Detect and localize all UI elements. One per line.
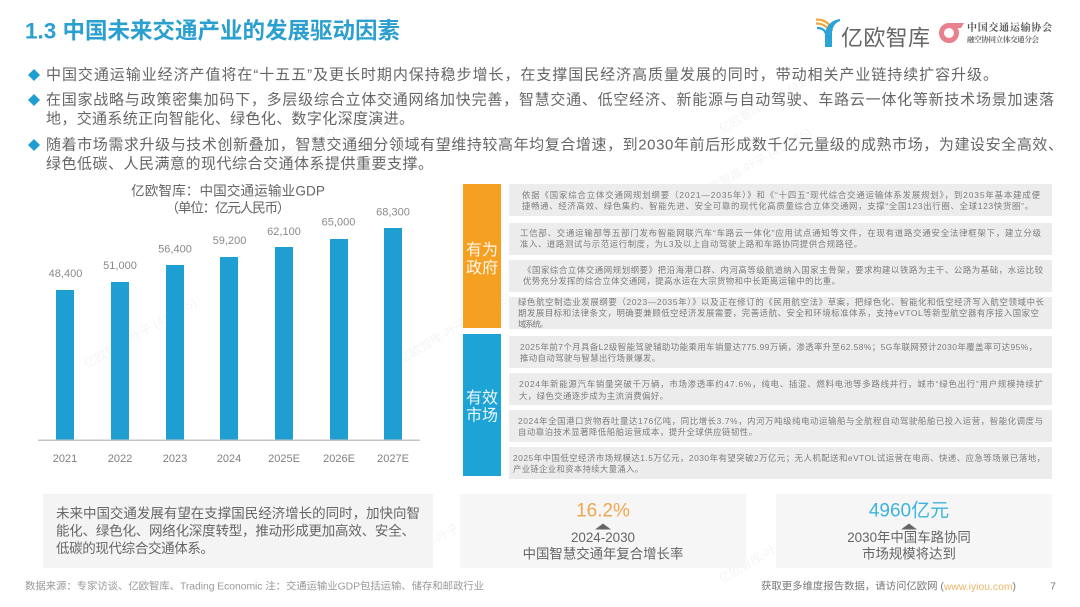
watermarks bbox=[62, 59, 834, 586]
year labels: 2023 bbox=[163, 453, 187, 465]
watermarks: 亿欧智库-叶子 (416955) bbox=[716, 59, 834, 136]
policy row 3 bbox=[509, 260, 1052, 292]
title: 1.3 中国未来交通产业的发展驱动因素 bbox=[25, 18, 400, 44]
policy row 1: 捷畅通、经济高效、绿色集约、智能先进、安全可靠的现代化高质量综合立体交通网，支撑“全国123出行圈、全球123快货圈”。 bbox=[522, 201, 1033, 211]
panel: 有为政府 bbox=[463, 184, 1052, 329]
stat card: 4960亿元: 2030年中国车路协同 bbox=[847, 529, 971, 545]
stat card: 4960亿元: 市场规模将达到 bbox=[862, 546, 956, 562]
bar chart: 中国交通运输业GDP bbox=[38, 182, 420, 465]
logo: 亿欧智库: 亿欧智库 bbox=[841, 26, 930, 50]
watermarks: 亿欧智库-叶子 (416955) bbox=[81, 294, 199, 371]
value labels: 62,100 bbox=[267, 226, 301, 238]
bullet 3 bbox=[28, 136, 1063, 172]
label: 有效市场: 有效 bbox=[466, 389, 498, 407]
market row 2 bbox=[509, 373, 1052, 405]
bars bbox=[56, 228, 402, 440]
policy row 1 bbox=[509, 184, 1052, 216]
watermarks: 亿欧智库-叶子 (416955) bbox=[396, 289, 514, 366]
bullet 1: 中国交通运输业经济产值将在“十五五”及更长时期内保持稳步增长，在支撑国民经济高质量发展的同时，带动相关产业链持续扩容升级。 bbox=[46, 66, 998, 84]
policy row 2: 工信部、交通运输部等五部门发布智能网联汽车“车路云一体化”应用试点通知等文件，在现有道路交通安全法律框架下，建立分级 bbox=[520, 228, 1042, 238]
stat card: 16.2%: 16.2% bbox=[576, 500, 630, 522]
chart title: （单位：亿元人民币） bbox=[166, 200, 290, 216]
year labels: 2026E bbox=[323, 453, 355, 465]
page number: 7 bbox=[1050, 582, 1056, 592]
watermarks: 亿欧智库-叶子 (416955) bbox=[276, 89, 394, 166]
watermarks: 亿欧智库-叶子 (416955) bbox=[62, 494, 180, 571]
callout: summary bbox=[43, 494, 433, 568]
policy row 4: 期发展目标和法律条文，明确要兼顾低空经济发展需要，完善适航、安全和环境标准体系，支持eVTOL等新型航空器有序接入国家空 bbox=[518, 308, 1039, 318]
logo: 中国交通运输协会: 中国交通运输协会 bbox=[967, 21, 1052, 34]
value labels bbox=[49, 206, 410, 280]
market row 3 bbox=[509, 410, 1052, 442]
policy row 1: 依据《国家综合立体交通网规划纲要（2021—2035年）》和《“十四五”现代综合交通运输体系发展规划》，到2035年基本建成便 bbox=[522, 190, 1041, 200]
market row 3: 自动靠泊技术显著降低船舶运营成本，提升全球供应链韧性。 bbox=[518, 427, 757, 437]
bullet 2: 地，交通系统正向智能化、绿色化、数字化深度演进。 bbox=[46, 110, 414, 128]
market row 4: 产业链企业和资本持续大量涌入。 bbox=[513, 464, 643, 474]
market row 4 bbox=[509, 447, 1052, 479]
market row 2: 2024年新能源汽车销量突破千万辆，市场渗透率约47.6%，纯电、插混、燃料电池等多路线并行，城市“绿色出行”用户规模持续扩 bbox=[519, 379, 1043, 389]
label: 有为政府 bbox=[463, 184, 501, 328]
value labels: 56,400 bbox=[158, 244, 192, 256]
value labels: 48,400 bbox=[49, 268, 82, 280]
policy row 4: 绿色航空制造业发展纲要（2023—2035年）》以及正在修订的《民用航空法》草案，把绿色化、智能化和低空经济写入航空领域中长 bbox=[518, 297, 1045, 307]
bullet 3: 随着市场需求升级与技术创新叠加，智慧交通细分领域有望维持较高年均复合增速，到2030年前后形成数千亿元量级的成熟市场，为建设安全高效、 bbox=[46, 136, 1063, 154]
value labels: 68,300 bbox=[376, 206, 410, 218]
market row 4: 2025年中国低空经济市场规模达1.5万亿元，2030年有望突破2万亿元；无人机配送和eVTOL试运营在电商、快递、应急等场景已落地， bbox=[513, 453, 1045, 463]
callout: summary: 未来中国交通发展有望在支撑国民经济增长的同时，加快向智 bbox=[56, 505, 420, 521]
logo: 中国交通运输协会 bbox=[942, 21, 1052, 44]
year labels: 2024 bbox=[217, 453, 241, 465]
label: 有为政府: 有为 bbox=[466, 241, 498, 259]
footer: source note: 数据来源：专家访谈、亿欧智库、Trading Economic 注：交通运输业GDP包括运输、储存和邮政行业 bbox=[25, 580, 484, 592]
policy row 3: 优势充分发挥的综合立体交通网，提高水运在大宗货物和中长距离运输中的比重。 bbox=[523, 276, 840, 286]
year labels: 2022 bbox=[108, 453, 132, 465]
label: 有效市场 bbox=[463, 334, 501, 476]
market row 1: 推动自动驾驶与智慧出行场景爆发。 bbox=[520, 353, 660, 363]
bullet list bbox=[28, 66, 1063, 172]
label: 有效市场: 市场 bbox=[466, 406, 498, 424]
panel: 有效市场 bbox=[463, 334, 1052, 479]
value labels: 51,000 bbox=[103, 260, 137, 272]
watermarks: 亿欧智库-叶子 (416955) bbox=[696, 124, 814, 201]
logo: 中国交通运输协会: 融空协同立体交通分会 bbox=[967, 34, 1040, 44]
label: 有为政府: 政府 bbox=[466, 259, 498, 277]
stat card: 16.2%: 中国智慧交通年复合增长率 bbox=[523, 546, 683, 562]
year labels bbox=[53, 453, 409, 465]
value labels: 65,000 bbox=[322, 216, 355, 228]
chart title: 亿欧智库：中国交通运输业GDP bbox=[131, 182, 325, 198]
market row 2: 大，绿色交通逐步成为主流消费偏好。 bbox=[519, 391, 668, 401]
policy row 3: 《国家综合立体交通网规划纲要》把沿海港口群、内河高等级航道纳入国家主骨架，要求构建以铁路为主干、公路为基础，水运比较 bbox=[523, 265, 1044, 275]
watermarks: 亿欧智库-叶子 (416955) bbox=[388, 494, 506, 571]
policy row 2 bbox=[509, 223, 1052, 255]
market row 1: 2025年前7个月具备L2级智能驾驶辅助功能乘用车销量达775.99万辆，渗透率升至62.58%；5G车联网预计2030年覆盖率可达95%， bbox=[520, 342, 1037, 352]
stat card: 16.2%: 2024-2030 bbox=[571, 530, 635, 545]
logo: 亿欧智库 bbox=[816, 19, 930, 50]
bullet 2 bbox=[28, 90, 1054, 128]
footer: website note: 获取更多维度报告数据，请访问亿欧网 (www.iyiou.com) bbox=[761, 580, 1016, 592]
callout: summary: 能化、绿色化、网络化深度转型，推动形成更加高效、安全、 bbox=[56, 522, 415, 538]
chart title bbox=[131, 182, 325, 216]
year labels: 2025E bbox=[268, 453, 300, 465]
year labels: 2027E bbox=[377, 453, 409, 465]
market row 3: 2024年全国港口货物吞吐量达176亿吨，同比增长3.7%，内河万吨级纯电动运输船与全航程自动驾驶船舶已投入运营，智能化调度与 bbox=[518, 416, 1043, 426]
stat card: 16.2% bbox=[460, 494, 746, 568]
bullet 2: 在国家战略与政策密集加码下，多层级综合立体交通网络加快完善，智慧交通、低空经济、新能源与自动驾驶、车路云一体化等新技术场景加速落 bbox=[46, 90, 1054, 108]
bullet 3: 绿色低碳、人民满意的现代综合交通体系提供重要支撑。 bbox=[46, 154, 433, 172]
policy row 2: 准入、道路测试与示范运行制度，为L3及以上自动驾驶上路和车路协同提供合规路径。 bbox=[520, 239, 862, 249]
policy row 4: 域系统。 bbox=[518, 319, 548, 329]
value labels: 59,200 bbox=[213, 235, 246, 247]
stat card: 4960亿元 bbox=[776, 494, 1052, 568]
watermarks: 亿欧智库-叶子 (416955) bbox=[716, 509, 834, 586]
policy row 4 bbox=[509, 297, 1052, 329]
market row 1 bbox=[509, 336, 1052, 368]
stat card: 4960亿元: 4960亿元 bbox=[869, 500, 949, 522]
callout: summary: 低碳的现代综合交通体系。 bbox=[56, 540, 214, 556]
year labels: 2021 bbox=[53, 453, 77, 465]
axis bbox=[38, 440, 420, 441]
